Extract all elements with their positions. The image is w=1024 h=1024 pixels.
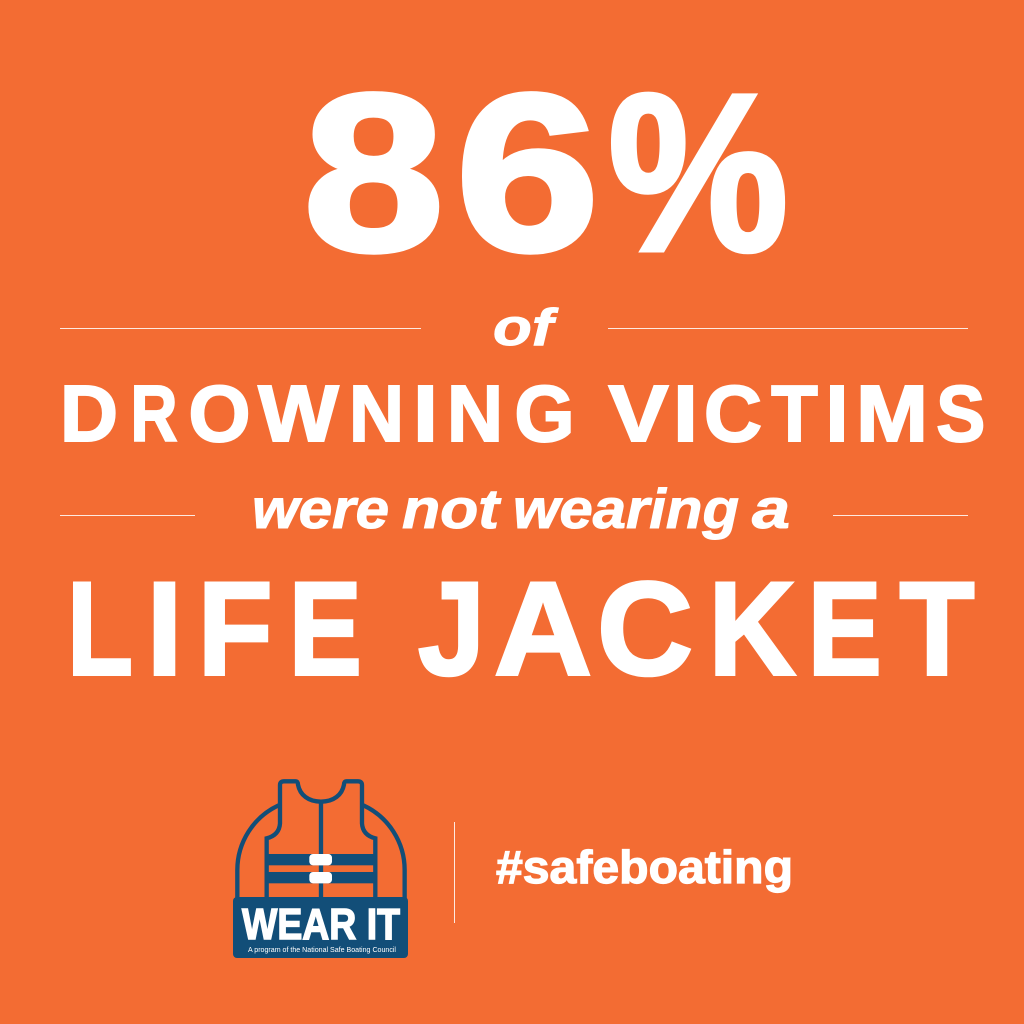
logo title: WEAR IT [242,900,400,949]
line: drowning victims: G [514,369,574,458]
word: of: of [493,299,559,357]
headline statistic: 8 [303,48,444,298]
line: drowning victims: R [130,369,178,458]
line: drowning victims: N [349,369,404,458]
line: drowning victims: C [704,369,762,458]
logo tagline: A program of the National Safe Boating Council [248,947,396,954]
line: life jacket: I [146,556,182,704]
line: life jacket: K [709,556,796,704]
line: life jacket: T [900,556,974,704]
line: life jacket: E [289,556,362,704]
icon: life jacket [237,781,405,898]
line: life jacket: E [808,556,882,704]
logo: wear it life jacket [233,781,408,958]
line: drowning victims: W [258,369,340,458]
headline statistic: 6 [455,48,599,298]
line: drowning victims: S [936,369,985,458]
hashtag: #safeboating [496,841,793,893]
line: drowning victims: I [413,369,438,458]
headline statistic: % [608,48,788,298]
line: life jacket: L [67,556,133,704]
line: life jacket: J [418,556,485,704]
line: drowning victims: T [771,369,818,458]
line: life jacket: A [494,556,592,704]
line: were not wearing a: not [402,477,502,540]
line: life jacket: C [597,556,693,704]
line: drowning victims: N [447,369,503,458]
line: drowning victims: D [60,369,118,458]
line: were not wearing a: wearing [513,477,739,540]
line: were not wearing a: a [752,477,790,540]
line: drowning victims: V [608,369,668,458]
line: life jacket: F [198,556,273,704]
line: drowning victims: M [856,369,928,458]
line: drowning victims: O [188,369,250,458]
line: drowning victims: I [673,369,698,458]
logo banner [233,897,408,958]
line: drowning victims: I [826,369,848,458]
line: were not wearing a: were [252,477,389,540]
